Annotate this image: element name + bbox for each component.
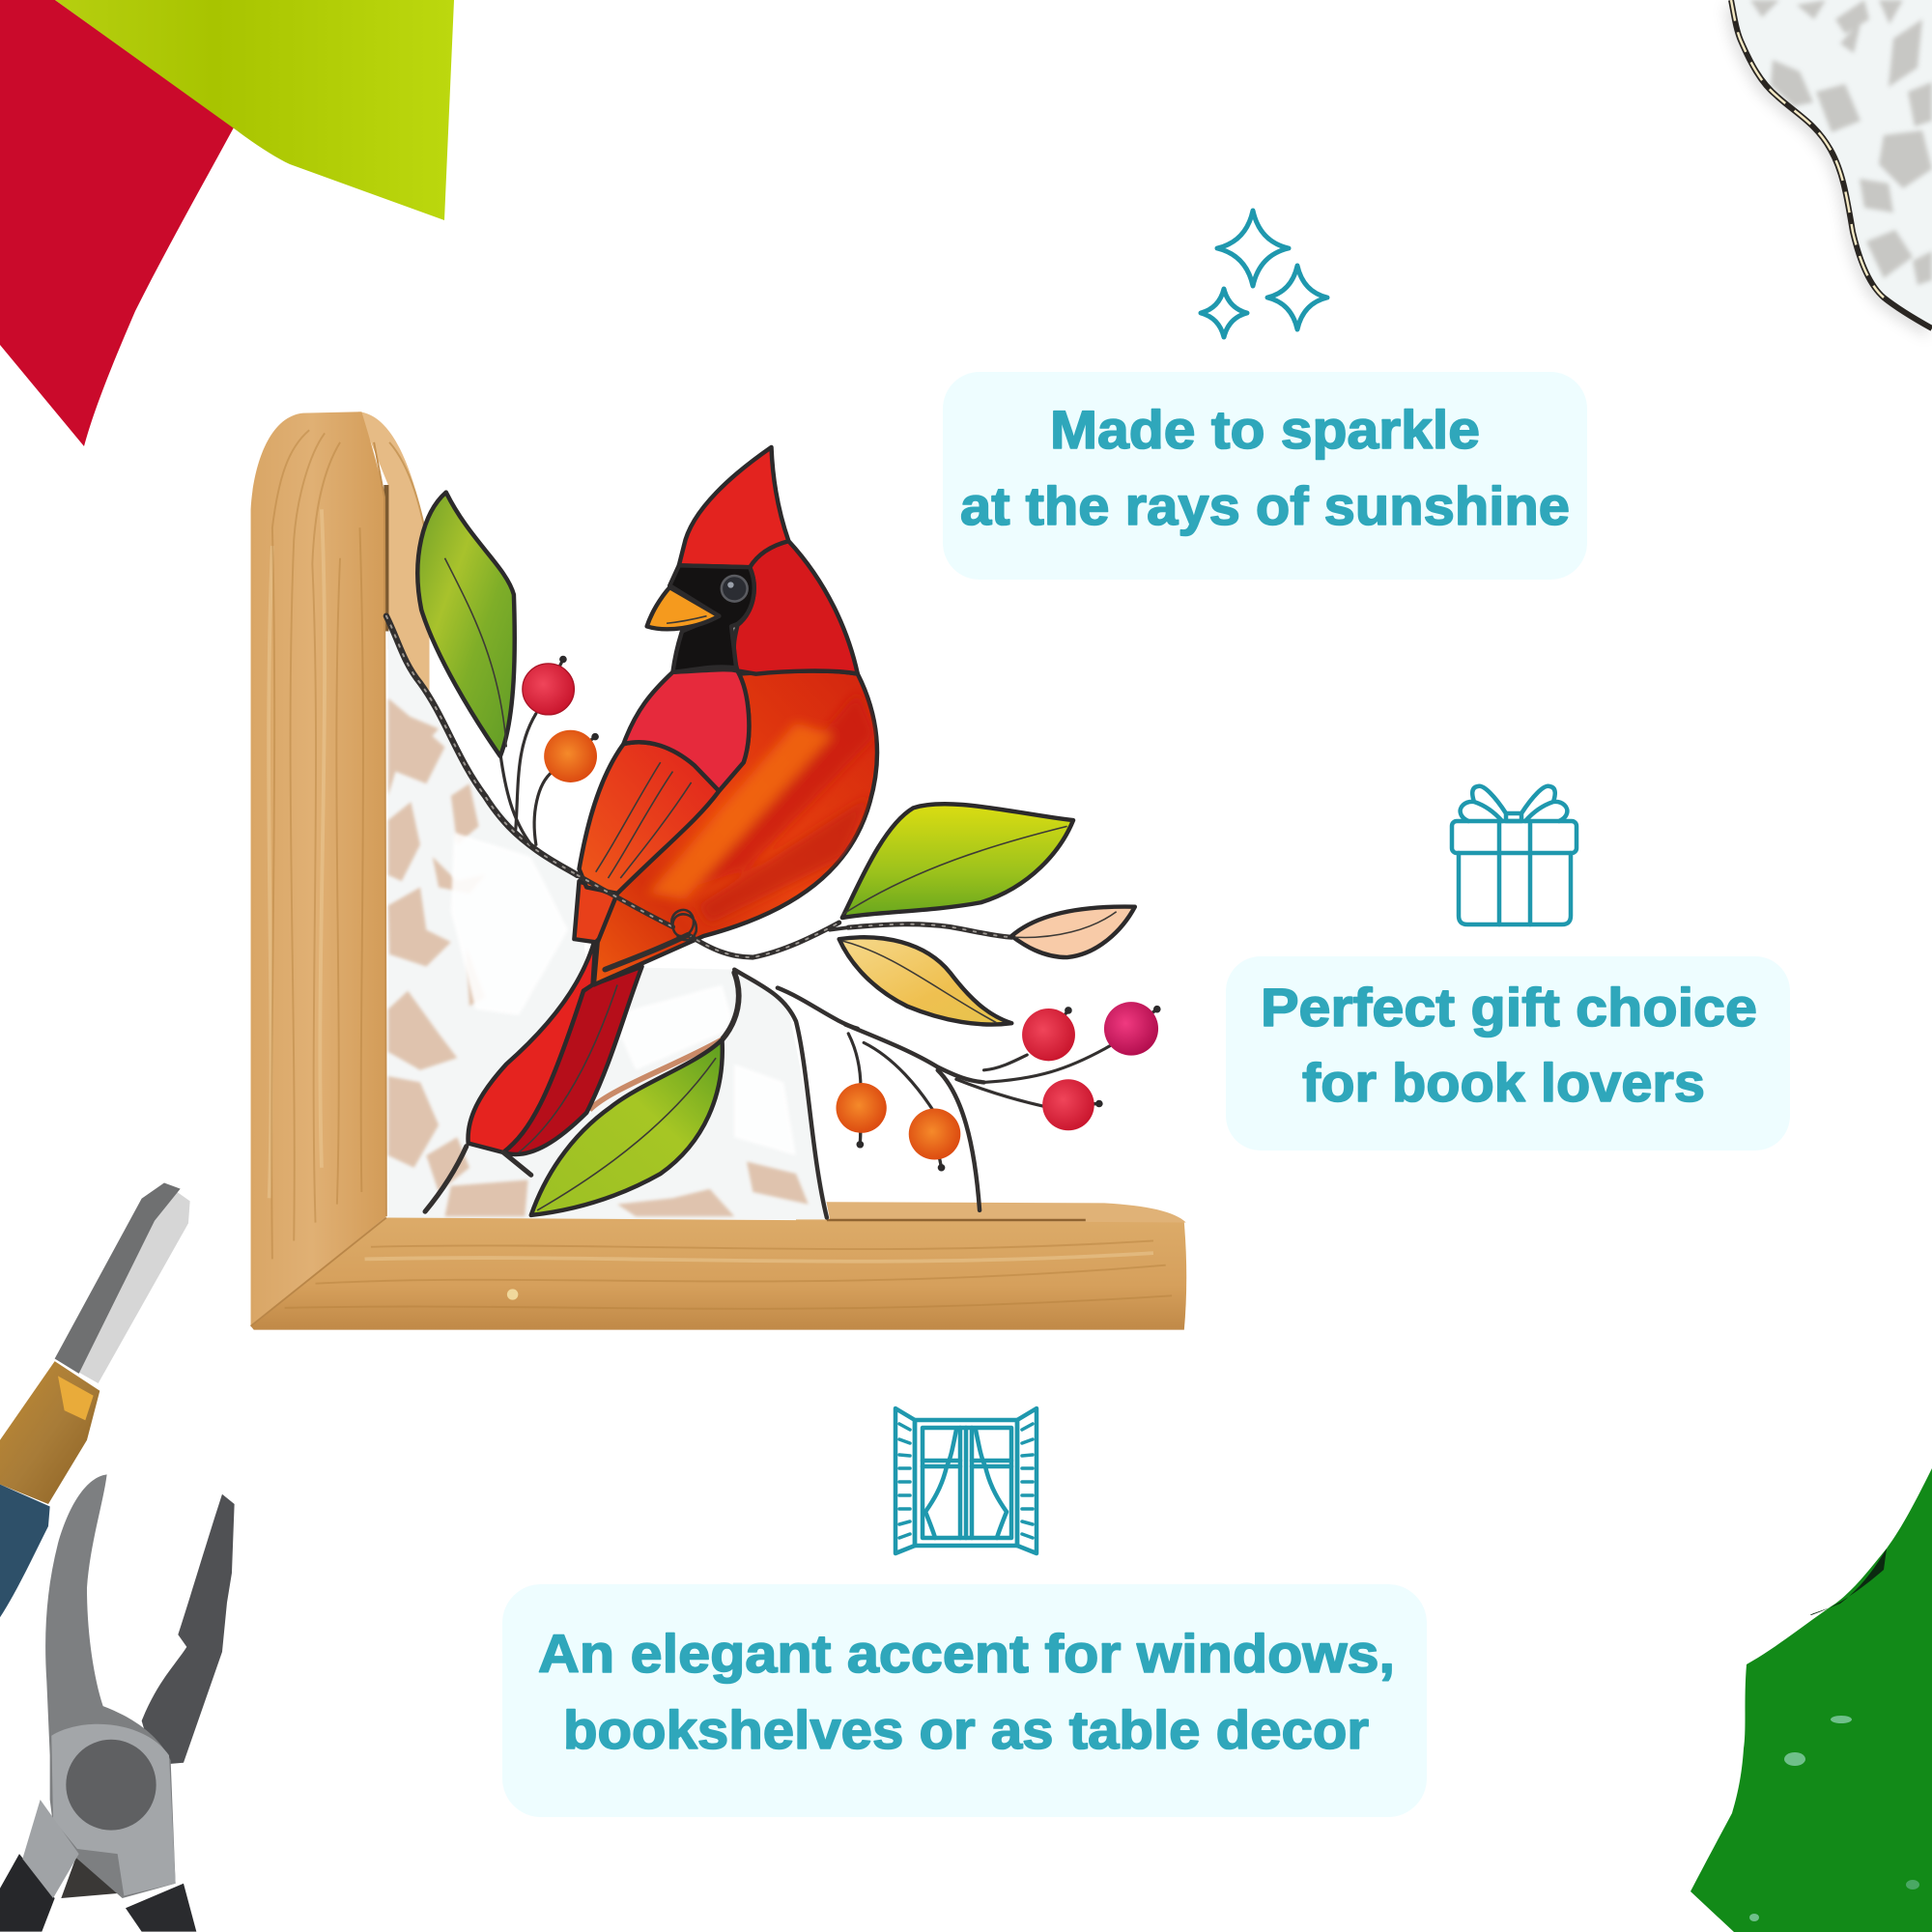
yellow leaf xyxy=(839,937,1011,1025)
crest xyxy=(679,447,788,567)
black mask xyxy=(669,565,754,672)
icon: window with shutters xyxy=(895,1408,1037,1553)
bottom leaf xyxy=(531,973,739,1215)
decoration: dark green glass piece xyxy=(1690,1468,1932,1932)
decoration: red felt sheet xyxy=(0,0,234,446)
icon: sparkles xyxy=(1201,211,1327,337)
wire crossing the bird with coil xyxy=(578,875,696,940)
callout: elegant accent xyxy=(502,1584,1427,1817)
wood base top surface xyxy=(796,1202,1186,1223)
berry: red right top xyxy=(1022,1007,1075,1061)
berry: orange lower right xyxy=(909,1109,960,1172)
callout heading line 2: at the rays of sunshine xyxy=(960,475,1570,536)
berry stems on the left xyxy=(500,659,1157,1168)
callout background xyxy=(943,372,1587,580)
chest xyxy=(623,669,749,791)
left leaf xyxy=(417,493,515,756)
eye xyxy=(722,576,748,602)
callout heading line 2: bookshelves or as table decor xyxy=(563,1699,1369,1760)
berry: magenta right xyxy=(1104,1002,1161,1056)
decoration: textured glass plate xyxy=(1731,0,1932,328)
callout background xyxy=(1226,956,1790,1151)
wing xyxy=(580,742,719,894)
pliers left jaw xyxy=(45,1474,176,1898)
wood glass slot shadow xyxy=(384,485,388,631)
callout: made to sparkle xyxy=(943,372,1587,580)
wood vertical face xyxy=(251,412,386,1326)
pliers pivot circle xyxy=(66,1740,156,1831)
nape xyxy=(734,541,858,674)
pliers right jaw xyxy=(142,1494,235,1765)
callout heading line 1: Made to sparkle xyxy=(1050,399,1480,460)
cardinal bird xyxy=(425,447,877,1211)
decoration: cutter and pliers tools xyxy=(0,1182,235,1932)
callout heading line 1: An elegant accent for windows, xyxy=(538,1623,1395,1684)
berry: red upper left xyxy=(523,656,574,715)
wood base front face xyxy=(251,1217,1186,1330)
berry: orange lower xyxy=(836,1083,887,1149)
large right leaf xyxy=(842,804,1073,918)
decoration: lime green sheet xyxy=(55,0,454,220)
clear textured glass panel xyxy=(388,619,830,1219)
callout: perfect gift choice xyxy=(1226,956,1790,1151)
tail left feather xyxy=(469,936,596,1152)
product: wooden bookend with stained glass cardinal xyxy=(251,412,1186,1330)
cutter blade xyxy=(55,1182,190,1383)
callout heading line 2: for book lovers xyxy=(1302,1052,1705,1113)
callout background xyxy=(502,1584,1427,1817)
wood rear arch xyxy=(358,412,430,693)
berry: red right lower xyxy=(1042,1079,1103,1130)
cutter blue handle xyxy=(0,1485,50,1617)
main branch and twigs xyxy=(605,923,1110,1217)
pliers handle sleeve xyxy=(22,1800,79,1898)
beak xyxy=(647,587,719,629)
small peach leaf xyxy=(1011,907,1135,957)
callout heading line 1: Perfect gift choice xyxy=(1261,977,1757,1037)
pliers black handles xyxy=(0,1854,196,1932)
pliers pivot plate xyxy=(51,1724,176,1895)
berry: orange upper left xyxy=(544,730,599,782)
lower flank xyxy=(574,881,617,942)
body with colour streaks xyxy=(594,671,877,984)
cutter brass collar xyxy=(0,1361,99,1504)
icon: gift box xyxy=(1452,786,1577,924)
tail dark feather xyxy=(503,967,642,1154)
twisted wire branch on the left xyxy=(386,616,578,875)
bird feet line xyxy=(425,1147,531,1211)
berry pip stems on the right xyxy=(860,1009,1157,1168)
